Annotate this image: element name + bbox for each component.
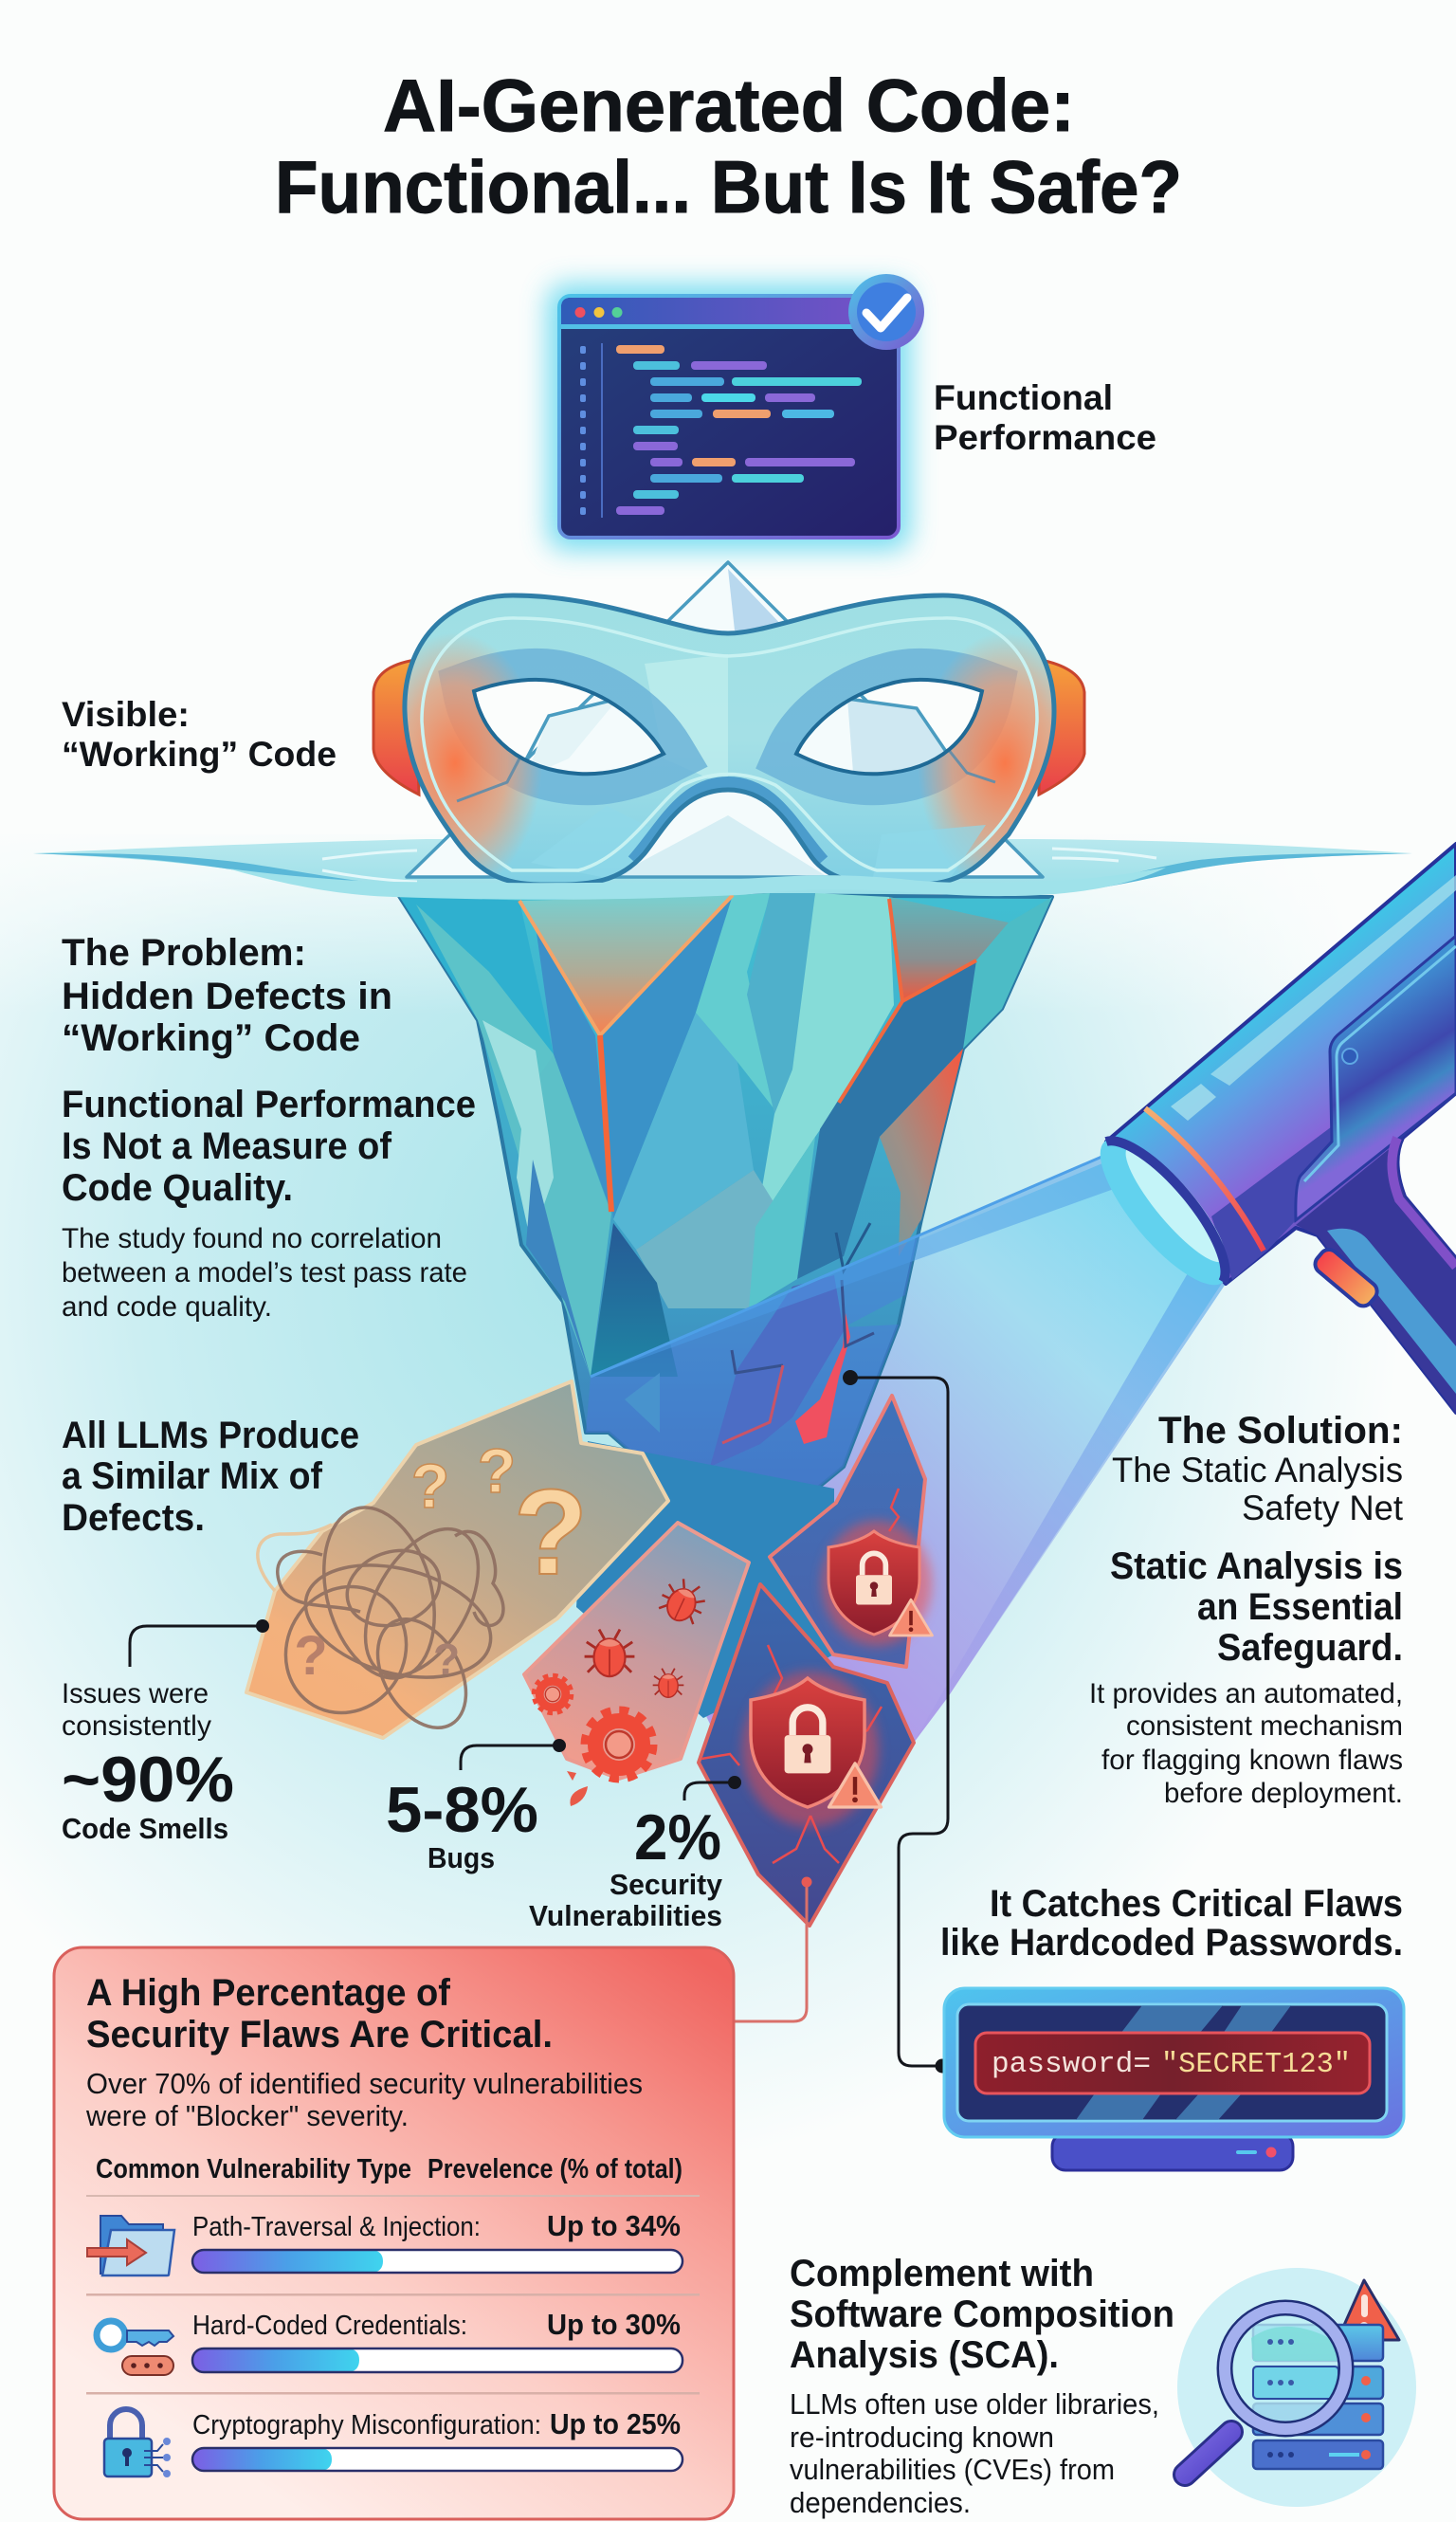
stat: security vulnerabilities: Security [610,1868,723,1901]
connector: bugs [461,1739,566,1770]
stat: code smells: ~90% [62,1744,234,1816]
water surface front band [228,868,1166,900]
table header: Prevelence (% of total) [428,2154,682,2184]
connector: crack to hardcoded password [843,1370,950,2073]
all llms heading: a Similar Mix of [62,1455,323,1497]
panel: software composition analysis text: LLMs often use older libraries, [790,2387,1159,2421]
panel description: were of "Blocker" severity. [85,2099,409,2132]
shard: code smells tangle: ? [294,1625,328,1687]
stat: bugs: 5-8% [386,1774,538,1846]
water surface back [33,839,1412,894]
stat: security vulnerabilities: Vulnerabilities [529,1899,722,1932]
connector: security vulnerabilities [684,1776,741,1800]
panel: the solution text: Safeguard. [1217,1627,1403,1669]
panel heading: Security Flaws Are Critical. [86,2014,553,2056]
panel: problem text: “Working” Code [62,1017,360,1059]
panel: the solution text: It provides an automated, [1089,1678,1403,1709]
shard: code smells tangle: ? [433,1635,460,1684]
panel: the solution text: The Solution: [1158,1410,1403,1452]
panel: high percentage of critical flaws [54,1947,734,2519]
icon: password monitor [944,1988,1404,2170]
all llms heading [62,1415,359,1539]
row: path traversal: Up to 34% [547,2209,681,2242]
panel description: Over 70% of identified security vulnerabilities [86,2067,643,2100]
panel: software composition analysis text: Software Composition [790,2294,1174,2335]
functional performance label: Performance [934,418,1156,457]
stat: code smells: Code Smells [62,1812,228,1845]
all llms heading: All LLMs Produce [62,1415,359,1456]
icon: magnifier over server stack with warning [1177,2268,1416,2507]
flashlight beam [591,1159,1226,1925]
catches critical flaws heading: like Hardcoded Passwords. [940,1922,1403,1964]
connector: code smells [130,1619,269,1667]
mask ear straps [373,660,1084,795]
panel: the solution text: Static Analysis is [1110,1545,1403,1587]
row: hard-coded credentials [97,2308,682,2375]
visible working code label: “Working” Code [62,735,337,774]
stat: code smells: Issues were [62,1678,209,1709]
shard: code smells tangle [246,1381,668,1744]
panel: software composition analysis text: re-introducing known [790,2421,1054,2454]
panel: problem text: Is Not a Measure of [62,1125,392,1167]
stat: code smells [62,1678,234,1845]
iceberg tip above water [407,562,1043,877]
all llms heading: Defects. [62,1497,205,1539]
shard: bugs [524,1523,749,1806]
panel: problem text: The Problem: [62,932,306,974]
icon: password monitor: "SECRET123" [1161,2048,1351,2081]
progress bar 30% [191,2348,682,2372]
shard: code smells tangle: ? [514,1465,588,1600]
panel: problem text: Functional Performance [62,1084,476,1125]
panel: software composition analysis text: Complement with [790,2253,1094,2294]
functional performance label [934,378,1156,457]
icon: lock with circuit [104,2409,171,2477]
panel: software composition analysis text: dependencies. [790,2486,971,2519]
panel heading: A High Percentage of [86,1972,451,2014]
panel: the solution text: The Static Analysis [1112,1451,1403,1489]
flashlight scanner tool [1081,844,1456,1413]
row: hard-coded credentials: Up to 30% [547,2308,681,2341]
catches critical flaws heading [940,1883,1403,1964]
panel: problem text: Code Quality. [62,1167,293,1209]
functional performance label: Functional [934,378,1113,417]
submerged iceberg [397,893,1054,1487]
row: path traversal: Path-Traversal & Injection: [192,2212,481,2242]
icon: folder with arrow [87,2216,174,2275]
panel: software composition analysis text: Analysis (SCA). [790,2334,1059,2376]
panel: the solution text: for flagging known flaws [1101,1745,1403,1776]
icon: code window with check badge [548,274,924,550]
beam upper edge ribbon [591,1155,1140,1377]
panel: the solution text: Safety Net [1242,1489,1404,1527]
panel: problem text: between a model’s test pass rate [62,1257,467,1288]
table header: Common Vulnerability Type [96,2154,411,2184]
title: AI-Generated Code: [383,64,1075,147]
glass mask [402,594,1056,884]
visible working code label [62,695,337,774]
row: cryptography misconfiguration: Up to 25% [550,2407,681,2440]
blue ice behind shards [576,1441,834,1718]
title: Functional... But Is It Safe? [275,145,1182,228]
panel: the solution text [1089,1410,1404,1809]
panel heading [86,1972,553,2056]
catches critical flaws heading: It Catches Critical Flaws [990,1883,1403,1925]
row: cryptography misconfiguration [104,2407,682,2477]
panel: software composition analysis text: vulnerabilities (CVEs) from [790,2453,1115,2486]
stat: security vulnerabilities [529,1801,723,1932]
shard: upper security lock [770,1396,933,1667]
icon: password monitor: password= [992,2048,1151,2081]
panel: problem text: and code quality. [62,1291,272,1323]
progress bar 34% [192,2250,682,2273]
shard: main security lock [699,1584,914,1926]
stat: security vulnerabilities: 2% [634,1801,721,1873]
panel description [85,2067,643,2132]
icon: key [97,2321,173,2375]
row: cryptography misconfiguration: Cryptography Misconfiguration: [192,2410,541,2440]
connector: shard to critical flaws panel [734,1877,811,2021]
panel: problem text: The study found no correlation [62,1223,442,1254]
progress bar 25% [192,2448,682,2471]
stat: code smells: consistently [62,1710,211,1742]
panel: software composition analysis text [790,2253,1174,2519]
title [275,64,1182,228]
panel: the solution text: an Essential [1197,1586,1403,1628]
panel: problem text: Hidden Defects in [62,976,392,1017]
stat: bugs: Bugs [428,1841,495,1874]
shard: code smells tangle: ? [411,1451,449,1521]
table header [96,2154,682,2184]
row: path traversal [87,2209,682,2275]
visible working code label: Visible: [62,695,190,734]
shard: code smells tangle: ? [478,1435,516,1506]
panel: the solution text: before deployment. [1164,1778,1403,1809]
panel: problem text [62,932,476,1323]
row: hard-coded credentials: Hard-Coded Credentials: [192,2311,467,2341]
panel: the solution text: consistent mechanism [1126,1710,1403,1742]
